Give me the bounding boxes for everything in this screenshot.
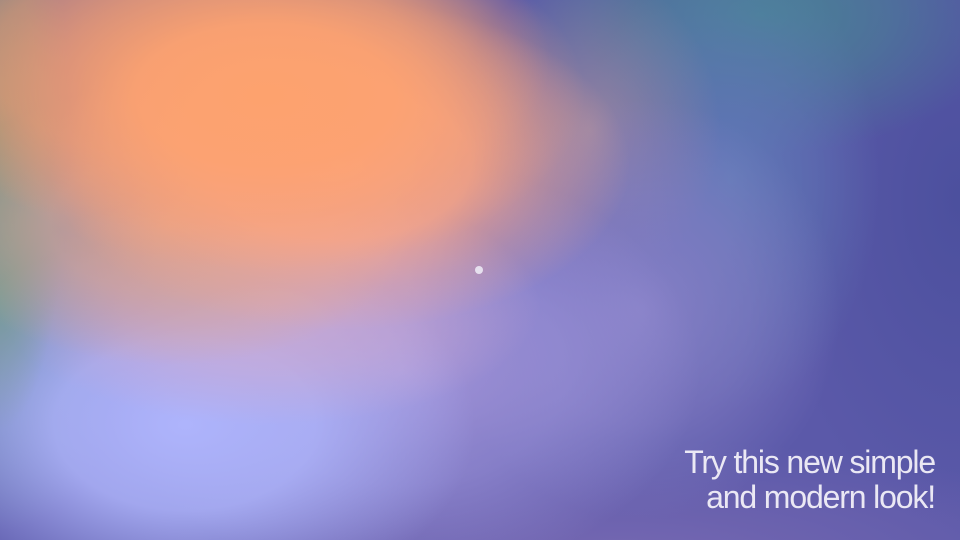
tagline text: Try this new simple <box>684 444 935 480</box>
tagline text <box>684 444 935 515</box>
tagline text: and modern look! <box>706 479 935 515</box>
center dot <box>475 266 483 274</box>
